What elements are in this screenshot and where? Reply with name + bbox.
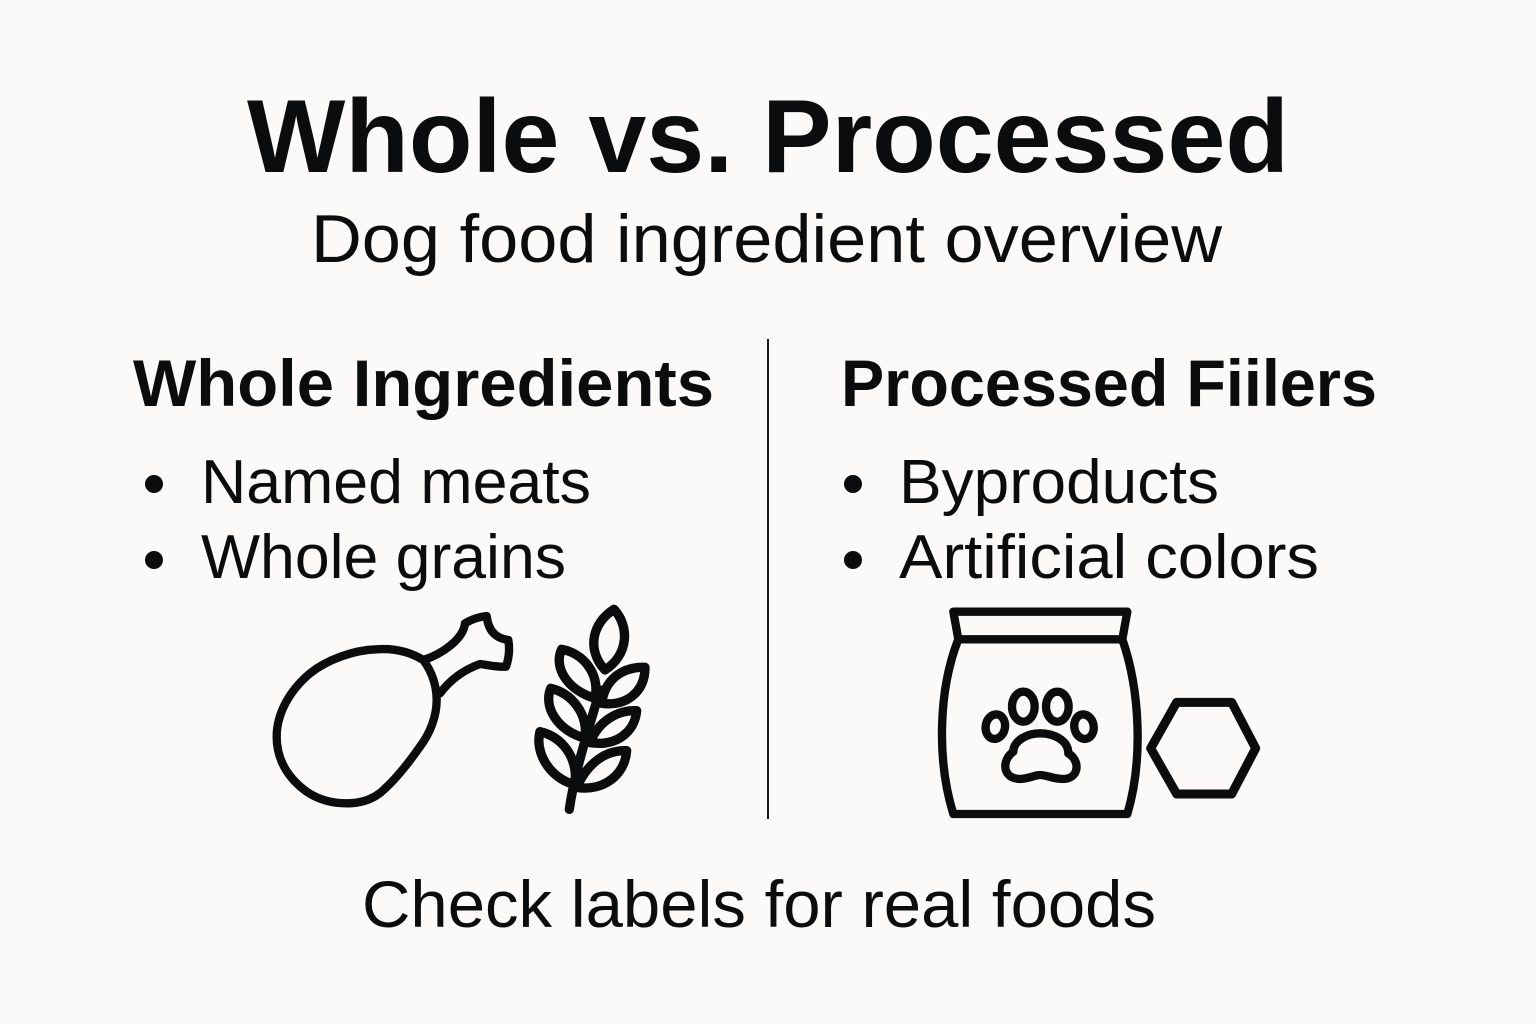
icon: chicken drumstick [277,616,509,803]
icon: dog food bag with paw [942,612,1138,814]
panel: whole ingredients [133,346,714,809]
footer text: Check labels for real foods [362,867,1156,941]
subtitle: Dog food ingredient overview [311,201,1223,277]
title: Whole vs. Processed [247,79,1289,195]
list item: whole grains: Whole grains [201,523,566,592]
heading: whole ingredients: Whole Ingredients [133,346,714,420]
list item: named meats: Named meats [201,448,591,517]
list item: artificial colors: Artificial colors [899,523,1319,592]
panel: processed fillers [841,346,1377,814]
heading: processed fillers: Processed Fiilers [841,346,1377,420]
icon: hexagon [1151,702,1256,794]
icon: wheat stalk [539,609,645,809]
list item: byproducts: Byproducts [899,448,1219,517]
